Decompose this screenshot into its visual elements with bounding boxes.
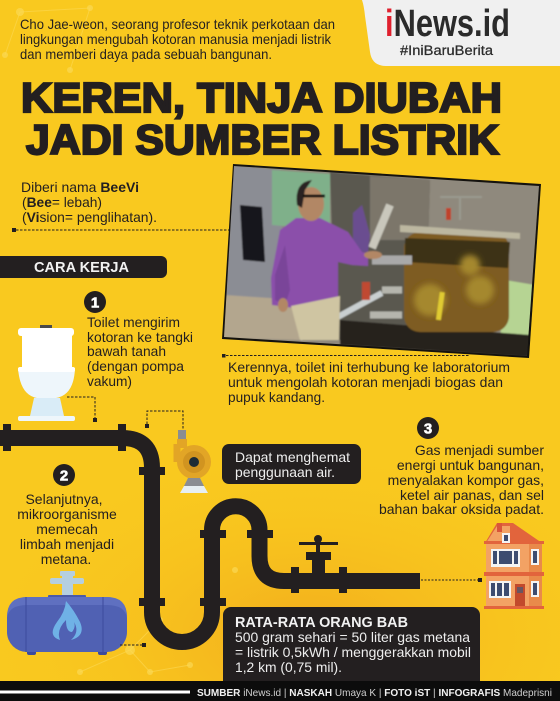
step 2 text: memecah <box>36 521 98 537</box>
photo caption connector <box>222 354 470 358</box>
connector: pump <box>145 411 183 429</box>
step 1 text <box>87 314 193 389</box>
icon: toilet <box>18 325 75 421</box>
title: JADI SUMBER LISTRIK <box>26 116 499 163</box>
step 1 text: vakum) <box>87 373 132 389</box>
step 3 badge: 3 <box>424 420 432 438</box>
BeeVi text: (Bee= lebah) <box>22 194 102 210</box>
logo wordmark: iNews.id <box>385 3 510 45</box>
BeeVi text: (Vision= penglihatan). <box>22 209 157 225</box>
intro text <box>20 16 335 62</box>
intro text: lingkungan mengubah kotoran manusia menjadi listrik <box>20 31 332 47</box>
stat box: 1,2 km (0,75 mil). <box>235 659 342 675</box>
icon: pump <box>177 430 211 493</box>
step 3 badge <box>417 417 439 439</box>
step 2 badge <box>53 464 75 486</box>
dapat menghemat callout <box>222 444 361 484</box>
photo caption: pupuk kandang. <box>228 389 325 405</box>
step 1 text: Toilet mengirim <box>87 314 180 330</box>
stat box: = listrik 0,5kWh / menggerakkan mobil <box>235 644 471 660</box>
step 1 text: kotoran ke tangki <box>87 329 193 345</box>
intro text: dan memberi daya pada sebuah bangunan. <box>20 46 272 62</box>
step 1 text: bawah tanah <box>87 343 166 359</box>
title <box>21 74 502 163</box>
stat box: 500 gram sehari = 50 liter gas metana <box>235 629 470 645</box>
icon: gas tank <box>7 571 127 655</box>
step 2 text: metana. <box>41 551 91 567</box>
step 1 badge <box>84 291 106 313</box>
step 3 text: Gas menjadi sumber <box>415 442 544 458</box>
dapat menghemat callout: penggunaan air. <box>235 464 335 480</box>
pipeline <box>0 424 420 642</box>
step 2 text <box>17 491 117 567</box>
step 3 text: ketel air panas, dan sel <box>400 487 544 503</box>
connector: BeeVi <box>12 228 231 232</box>
connector: tank <box>120 643 146 647</box>
stat box: RATA-RATA ORANG BAB <box>235 615 408 631</box>
dapat menghemat callout: Dapat menghemat <box>235 449 350 465</box>
cara kerja label <box>0 256 167 278</box>
intro text: Cho Jae-weon, seorang profesor teknik perkotaan dan <box>20 16 335 32</box>
step 2 text: Selanjutnya, <box>25 491 103 507</box>
icon: house <box>484 523 544 609</box>
connector: toilet <box>67 397 97 422</box>
logo tagline: #IniBaruBerita <box>400 43 494 58</box>
valve <box>299 535 338 574</box>
step 2 badge: 2 <box>60 468 68 484</box>
logo panel <box>362 0 560 66</box>
step 1 badge: 1 <box>91 294 99 312</box>
step 3 text: bahan bakar oksida padat. <box>379 501 544 517</box>
step 3 text <box>379 442 544 517</box>
step 2 text: limbah menjadi <box>20 536 114 552</box>
title: KEREN, TINJA DIUBAH <box>21 74 502 121</box>
connector: house <box>421 578 482 582</box>
BeeVi text <box>21 179 157 225</box>
photo caption: untuk mengolah kotoran menjadi biogas dan <box>228 374 503 390</box>
photo caption <box>228 359 510 405</box>
footer: SUMBER iNews.id | NASKAH Umaya K | FOTO iST | INFOGRAFIS Madeprisni <box>197 687 552 699</box>
footer <box>0 681 560 701</box>
photo caption: Kerennya, toilet ini terhubung ke laboratorium <box>228 359 510 375</box>
step 1 text: (dengan pompa <box>87 358 184 374</box>
cara kerja label: CARA KERJA <box>34 260 130 276</box>
step 2 text: mikroorganisme <box>17 506 117 522</box>
BeeVi text: Diberi nama BeeVi <box>21 179 139 195</box>
step 3 text: menyalakan kompor gas, <box>388 472 544 488</box>
step 3 text: energi untuk bangunan, <box>397 457 544 473</box>
photo <box>220 160 545 360</box>
stat box <box>223 607 480 681</box>
